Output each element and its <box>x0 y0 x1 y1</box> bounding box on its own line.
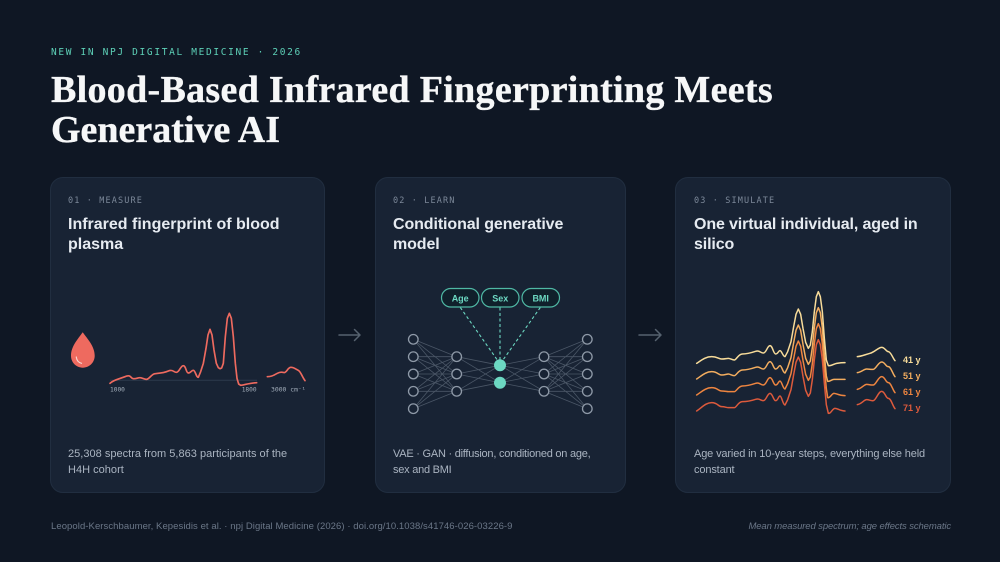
chart: measured spectrum: 3000 cm⁻¹ <box>271 386 306 394</box>
chart: measured spectrum: 1000 <box>110 386 125 394</box>
footer citation: Leopold-Kerschbaumer, Kepesidis et al. · npj Digital Medicine (2026) · doi.org/10.1038/s41746-026-03226-9 <box>51 521 513 532</box>
panel label: simulate: 03 · SIMULATE <box>694 196 775 206</box>
trace: 41 y <box>697 292 895 366</box>
label: 51 y: 51 y <box>903 371 921 381</box>
panel caption: measure: 25,308 spectra from 5,863 participants of the <box>68 448 287 460</box>
panel caption: simulate <box>694 448 925 476</box>
panel heading: measure: plasma <box>68 236 123 253</box>
pill: sex <box>482 288 519 307</box>
icon: blood drop <box>71 332 95 368</box>
footer note: Mean measured spectrum; age effects schematic <box>748 521 951 532</box>
panel heading: simulate <box>694 216 918 253</box>
arrow: measure to learn <box>339 330 360 340</box>
network connections <box>413 339 587 409</box>
title <box>51 69 773 151</box>
input nodes <box>408 334 592 414</box>
panel caption: learn: sex and BMI <box>393 464 452 476</box>
pill: age: Age <box>452 293 469 303</box>
pill: sex: Sex <box>492 293 508 303</box>
panel heading: learn <box>393 216 563 253</box>
pill: BMI: BMI <box>532 293 549 303</box>
panel label: learn: 02 · LEARN <box>393 196 455 206</box>
panel heading: simulate: silico <box>694 236 734 253</box>
panel caption: simulate: Age varied in 10-year steps, everything else held <box>694 448 925 460</box>
pill: BMI <box>522 288 560 307</box>
trace: 71 y <box>697 340 895 413</box>
label: 41 y: 41 y <box>903 355 921 365</box>
condition links <box>460 308 540 360</box>
eyebrow: NEW IN NPJ DIGITAL MEDICINE · 2026 <box>51 47 302 58</box>
panel: measure <box>50 177 325 493</box>
diagram: conditional generative network <box>408 288 592 414</box>
panel caption: learn <box>393 448 590 476</box>
panel heading: learn: Conditional generative <box>393 216 563 233</box>
panel heading: simulate: One virtual individual, aged in <box>694 216 918 233</box>
pill: age <box>442 288 479 307</box>
panel label: measure: 01 · MEASURE <box>68 196 143 206</box>
latent nodes <box>494 359 506 389</box>
chart: measured spectrum: 1800 <box>242 386 257 394</box>
label: 71 y: 71 y <box>903 403 921 413</box>
panel caption: measure <box>68 448 287 476</box>
title: Generative AI <box>51 109 280 151</box>
panel heading: measure: Infrared fingerprint of blood <box>68 216 280 233</box>
panel caption: measure: H4H cohort <box>68 464 124 476</box>
trace: 61 y <box>697 324 895 398</box>
panel caption: learn: VAE · GAN · diffusion, conditioned on age, <box>393 448 590 460</box>
title: Blood-Based Infrared Fingerprinting Meets <box>51 69 773 111</box>
panel caption: simulate: constant <box>694 464 734 476</box>
trace: 51 y <box>697 308 895 381</box>
arrow: learn to simulate <box>639 330 661 340</box>
panel heading: measure <box>68 216 280 253</box>
panel: simulate <box>675 177 951 493</box>
chart: measured spectrum <box>110 313 306 394</box>
chart: aged spectra <box>697 292 921 413</box>
panel heading: learn: model <box>393 236 440 253</box>
panel: learn <box>375 177 626 493</box>
label: 61 y: 61 y <box>903 387 921 397</box>
